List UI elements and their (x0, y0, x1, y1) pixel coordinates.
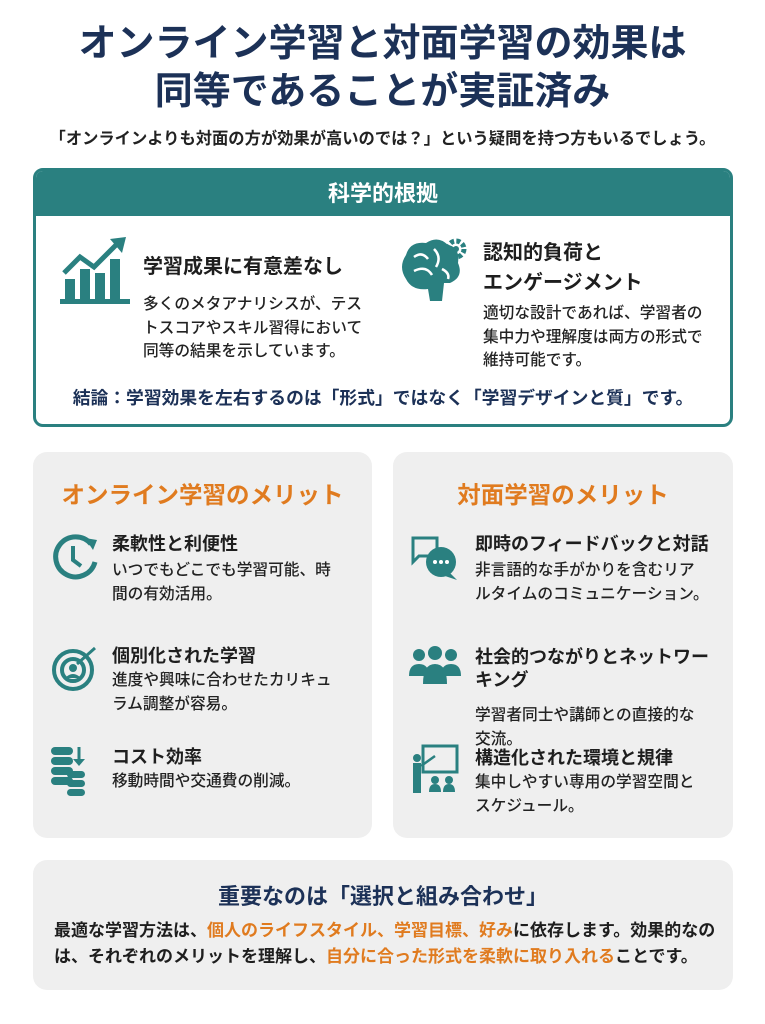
key body (54, 921, 715, 966)
online item 3: コスト効率 (112, 747, 202, 767)
icon: clock (53, 534, 98, 580)
f2f item 2: キング (475, 670, 528, 690)
online item 2 (112, 646, 332, 713)
panel: online merits (33, 452, 372, 838)
online item 3: 移動時間や交通費の削減。 (112, 773, 300, 790)
evidence item 1: トスコアやスキル習得において (143, 320, 362, 336)
evidence item 2 (483, 242, 703, 369)
online item 1: 柔軟性と利便性 (112, 534, 238, 554)
online heading: オンライン学習のメリット (62, 482, 344, 508)
online item 2: 進度や興味に合わせたカリキュ (112, 672, 332, 689)
title: オンライン学習と対面学習の効果は (78, 23, 686, 65)
evidence header (36, 171, 730, 216)
online item 1 (112, 534, 331, 603)
icon: chat (412, 536, 457, 580)
evidence item 2: エンゲージメント (483, 272, 643, 294)
f2f item 2: 社会的つながりとネットワー (475, 647, 709, 667)
f2f heading: 対面学習のメリット (457, 482, 669, 508)
online item 1: 間の有効活用。 (112, 586, 222, 603)
evidence item 1: 学習成果に有意差なし (143, 256, 343, 278)
evidence item 2: 集中力や理解度は両方の形式で (483, 328, 703, 346)
f2f item 3: 集中しやすい専用の学習空間と (475, 774, 694, 791)
icon: brain gear (402, 238, 466, 301)
f2f item 1: ルタイムのコミュニケーション。 (475, 586, 709, 603)
online item 2: ラム調整が容易。 (112, 696, 237, 713)
panel: key message (33, 860, 733, 990)
online item 2: 個別化された学習 (112, 646, 256, 666)
f2f item 3: スケジュール。 (475, 798, 584, 815)
conclusion: 結論：学習効果を左右するのは「形式」ではなく「学習デザインと質」です。 (73, 388, 693, 408)
evidence header: 科学的根拠 (328, 181, 438, 206)
f2f item 2 (475, 647, 709, 748)
f2f item 1 (475, 534, 709, 603)
icon: target (52, 647, 96, 691)
evidence item 1 (143, 256, 362, 360)
panel: scientific evidence (33, 168, 733, 427)
icon: people (409, 646, 461, 684)
key body: は、それぞれのメリットを理解し、自分に合った形式を柔軟に取り入れることです。 (54, 947, 698, 966)
f2f item 3 (475, 748, 694, 815)
online item 1: いつでもどこでも学習可能、時 (112, 562, 331, 579)
evidence item 1: 同等の結果を示しています。 (143, 343, 345, 360)
f2f item 2: 交流。 (475, 731, 522, 748)
f2f item 1: 即時のフィードバックと対話 (475, 534, 709, 554)
icon: classroom (413, 744, 458, 793)
evidence item 1: 多くのメタアナリシスが、テス (143, 296, 362, 313)
evidence item 2: 適切な設計であれば、学習者の (483, 305, 702, 322)
icon: coins (51, 747, 85, 796)
key heading: 重要なのは「選択と組み合わせ」 (218, 884, 548, 909)
evidence item 2: 認知的負荷と (483, 242, 603, 264)
panel: face-to-face merits (393, 452, 733, 838)
subtitle: 「オンラインよりも対面の方が効果が高いのでは？」という疑問を持つ方もいるでしょう。 (50, 130, 715, 148)
f2f item 2: 学習者同士や講師との直接的な (475, 707, 694, 724)
evidence item 2: 維持可能です。 (483, 352, 591, 369)
f2f item 3: 構造化された環境と規律 (475, 748, 673, 768)
key body: 最適な学習方法は、個人のライフスタイル、学習目標、好みに依存します。効果的なの (54, 921, 715, 940)
title (78, 23, 686, 113)
online item 3 (112, 747, 300, 790)
icon: growth chart (60, 237, 130, 304)
title: 同等であることが実証済み (155, 71, 610, 113)
f2f item 1: 非言語的な手がかりを含むリア (475, 562, 695, 579)
